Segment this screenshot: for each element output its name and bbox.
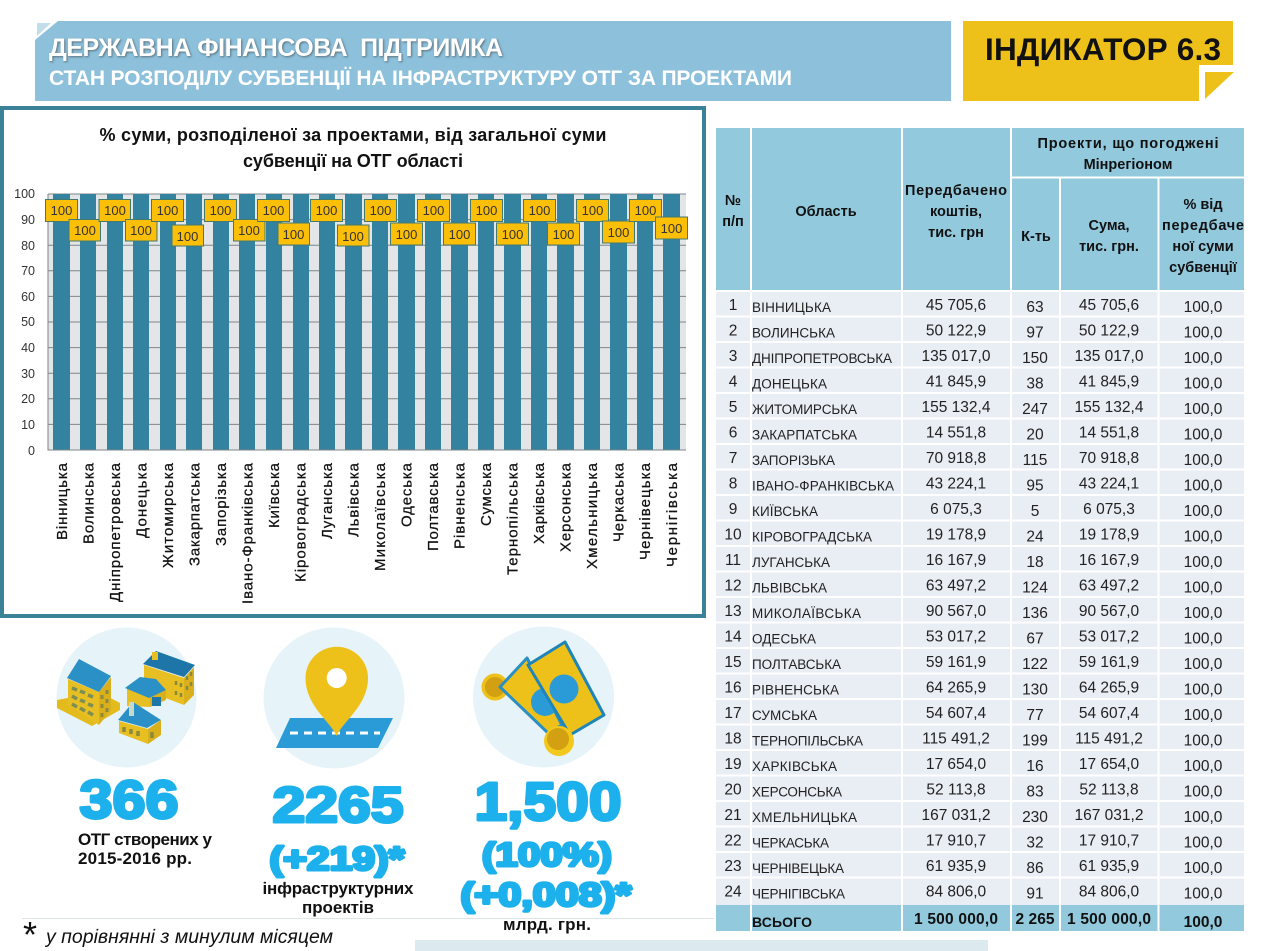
row 15: 15: [724, 654, 742, 671]
data labels: 100: [316, 203, 337, 218]
indicator badge: [963, 21, 1234, 101]
row 6: ЗАКАРПАТСЬКА: [752, 428, 857, 442]
row 11: 11: [725, 552, 741, 569]
row 20: [724, 782, 1223, 800]
row 16: 64 265,9: [1079, 680, 1139, 696]
row 8: [729, 476, 1223, 494]
y axis labels: 80: [21, 239, 35, 253]
row 4: 41 845,9: [926, 374, 986, 390]
row 22: 17 910,7: [1079, 832, 1139, 850]
row 18: 100,0: [1184, 732, 1223, 750]
total row: 1 500 000,0: [1067, 911, 1151, 928]
panel: bar chart: [2, 108, 704, 616]
row 11: 16 167,9: [926, 552, 986, 569]
row 11: [725, 552, 1223, 571]
row 22: [724, 832, 1223, 852]
table header: передбаче: [1162, 218, 1244, 234]
row 13: 90 567,0: [1079, 603, 1140, 620]
row 15: 59 161,9: [1079, 654, 1139, 671]
row 10: 19 178,9: [1079, 526, 1139, 544]
header banner: СТАН РОЗПОДІЛУ СУБВЕНЦІЇ НА ІНФРАСТРУКТУРУ ОТГ ЗА ПРОЕКТАМИ: [49, 67, 792, 90]
row 2: 100,0: [1184, 324, 1223, 342]
data labels: 100: [635, 203, 656, 218]
row 11: 18: [1026, 554, 1044, 571]
row 13: 90 567,0: [926, 603, 987, 620]
row 5: 100,0: [1184, 401, 1223, 418]
y axis labels: 40: [21, 341, 35, 355]
row 14: 53 017,2: [926, 628, 986, 646]
row 3: 135 017,0: [922, 348, 991, 365]
x axis labels: Івано-Франківська: [240, 462, 256, 604]
data labels: 100: [342, 229, 364, 244]
row 4: 4: [729, 374, 738, 390]
data labels: 100: [553, 227, 574, 242]
row 6: 14 551,8: [926, 424, 986, 442]
row 17: [724, 705, 1223, 724]
header banner: ДЕРЖАВНА ФІНАНСОВА ПІДТРИМКА: [49, 34, 503, 62]
table header: №: [725, 193, 741, 209]
x axis labels: Хмельницька: [584, 462, 601, 569]
row 17: 54 607,4: [1079, 705, 1140, 722]
data labels: 100: [449, 227, 470, 242]
table header: тис. грн: [928, 225, 984, 241]
x axis labels: Запорізька: [213, 462, 230, 546]
row 18: [724, 730, 1223, 750]
row 17: 17: [724, 705, 742, 722]
row 8: 8: [729, 476, 737, 492]
x axis labels: Херсонська: [558, 462, 574, 552]
row 3: 100,0: [1184, 350, 1223, 367]
row 24: 84 806,0: [926, 884, 987, 900]
row 16: 100,0: [1184, 682, 1223, 698]
row 10: 19 178,9: [926, 526, 986, 544]
data labels: 100: [502, 227, 523, 242]
data labels: 100: [283, 227, 304, 242]
row 19: 17 654,0: [1079, 756, 1140, 773]
row 24: 91: [1026, 886, 1044, 902]
row 14: [724, 628, 1223, 648]
row 16: 16: [724, 680, 742, 696]
x axis labels: Кіровоградська: [292, 462, 310, 582]
row 23: [724, 858, 1223, 877]
x axis labels: Дніпропетровська: [107, 462, 124, 602]
row 11: 100,0: [1184, 554, 1223, 571]
row 18: 199: [1022, 732, 1048, 750]
row 1: 1: [729, 297, 737, 314]
x axis labels: Львівська: [346, 462, 362, 537]
row 23: 23: [724, 858, 742, 875]
row 8: 100,0: [1184, 478, 1223, 494]
row 20: 83: [1026, 784, 1044, 800]
row 15: ПОЛТАВСЬКА: [752, 657, 841, 672]
row 10: КІРОВОГРАДСЬКА: [752, 530, 872, 544]
row 2: 50 122,9: [1079, 322, 1139, 340]
row 21: 230: [1022, 809, 1048, 826]
table header: ної суми: [1172, 239, 1234, 255]
row 21: [724, 807, 1223, 826]
table header: Мінрегіоном: [1084, 157, 1172, 173]
row 23: 86: [1026, 860, 1044, 877]
y axis labels: 60: [21, 290, 35, 304]
data labels: 100: [582, 203, 603, 218]
number: 100%: (100%): [482, 836, 612, 873]
row 22: 100,0: [1184, 834, 1223, 852]
table: [716, 128, 1244, 931]
row 15: [724, 654, 1223, 673]
y axis labels: 0: [28, 444, 35, 458]
data labels: 100: [423, 203, 444, 218]
row 10: 24: [1026, 528, 1044, 546]
row 7: 70 918,8: [926, 450, 986, 467]
data labels: 100: [608, 225, 629, 240]
row 12: 63 497,2: [926, 578, 986, 594]
caption: communities: [78, 830, 213, 868]
row 11: 16 167,9: [1079, 552, 1139, 569]
row 1: 45 705,6: [1079, 297, 1139, 314]
row 8: ІВАНО-ФРАНКІВСЬКА: [752, 478, 894, 494]
row 14: ОДЕСЬКА: [752, 632, 816, 646]
row 6: 20: [1026, 426, 1044, 444]
row 12: 100,0: [1184, 580, 1223, 596]
footnote: у порівнянні з минулим місяцем: [44, 926, 333, 948]
row 21: ХМЕЛЬНИЦЬКА: [752, 810, 857, 825]
stat: communities: [56, 628, 213, 868]
number: 2265: 2265: [272, 777, 404, 833]
x axis labels: Сумська: [478, 462, 495, 526]
bars: [53, 194, 680, 450]
number: +219: (+219)*: [270, 840, 405, 877]
y axis labels: [14, 187, 35, 458]
y axis labels: 20: [21, 392, 35, 406]
row 6: 14 551,8: [1079, 424, 1139, 442]
row 19: 19: [724, 756, 742, 773]
row 3: ДНІПРОПЕТРОВСЬКА: [752, 351, 892, 366]
row 14: 100,0: [1184, 630, 1223, 648]
row 10: 100,0: [1184, 528, 1223, 546]
row 13: 13: [724, 603, 742, 620]
row 21: 167 031,2: [922, 807, 990, 824]
row 21: 167 031,2: [1075, 807, 1143, 824]
x axis labels: Луганська: [319, 462, 336, 539]
row 9: КИЇВСЬКА: [752, 504, 818, 519]
row 1: 45 705,6: [926, 297, 986, 314]
x axis labels: Тернопільська: [504, 462, 522, 575]
caption: projects: [262, 879, 414, 917]
icon: banknotes and coins: [473, 626, 614, 768]
row 2: ВОЛИНСЬКА: [752, 326, 835, 340]
row 9: [729, 501, 1223, 520]
row 23: 61 935,9: [1079, 858, 1139, 875]
row 1: [729, 297, 1223, 316]
row 1: ВІННИЦЬКА: [752, 300, 831, 315]
y axis labels: 100: [14, 187, 35, 201]
row 19: [724, 756, 1223, 775]
row 6: [729, 424, 1223, 444]
row 9: 100,0: [1184, 503, 1223, 520]
row 12: [724, 578, 1223, 596]
row 16: [724, 680, 1223, 698]
row 7: [729, 450, 1223, 469]
row 4: 38: [1026, 376, 1044, 392]
data labels: 100: [104, 203, 126, 218]
row 2: 50 122,9: [926, 322, 986, 340]
x axis labels: Чернівецька: [637, 462, 654, 560]
row 3: [729, 348, 1223, 367]
row 19: 100,0: [1184, 758, 1223, 775]
row 2: 97: [1026, 324, 1044, 342]
row 24: 24: [724, 884, 742, 900]
row 5: ЖИТОМИРСЬКА: [752, 402, 857, 417]
caption: communities: ОТГ створених у: [78, 830, 213, 849]
row 23: 100,0: [1184, 860, 1223, 877]
y axis labels: 70: [21, 264, 35, 278]
row 18: 115 491,2: [922, 730, 990, 748]
header banner: [35, 21, 951, 101]
row 7: 100,0: [1184, 452, 1223, 469]
row 5: 5: [729, 399, 737, 416]
row 10: 10: [724, 526, 742, 544]
table header: % від: [1183, 197, 1223, 213]
row 7: ЗАПОРІЗЬКА: [752, 453, 835, 468]
row 17: СУМСЬКА: [752, 708, 817, 723]
caption: money: млрд. грн.: [503, 915, 591, 934]
total row: ВСЬОГО: [752, 914, 812, 930]
table header: субвенції: [1169, 260, 1238, 276]
table header: коштів,: [930, 204, 982, 220]
row 7: 70 918,8: [1079, 450, 1139, 467]
data labels: 100: [529, 203, 550, 218]
row 4: 41 845,9: [1079, 374, 1139, 390]
row 23: 61 935,9: [926, 858, 986, 875]
row 18: 18: [724, 730, 742, 748]
table header: К-ть: [1021, 229, 1051, 245]
y axis labels: 50: [21, 315, 35, 329]
data labels: 100: [370, 203, 391, 218]
row 1: 100,0: [1184, 299, 1223, 316]
indicator badge: ІНДИКАТОР 6.3: [985, 31, 1221, 67]
row 12: 124: [1022, 580, 1048, 596]
row 18: ТЕРНОПІЛЬСЬКА: [752, 734, 863, 748]
x axis labels: Волинська: [80, 462, 98, 544]
row 5: [729, 399, 1223, 418]
row 24: 84 806,0: [1079, 884, 1140, 900]
y axis labels: 10: [21, 418, 35, 432]
icon: map pin on road: [264, 628, 404, 768]
x axis labels: Одеська: [398, 462, 416, 527]
row 3: 150: [1022, 350, 1048, 367]
data labels: 100: [210, 203, 231, 218]
total row: 100,0: [1184, 914, 1222, 931]
row 5: 155 132,4: [922, 399, 991, 416]
row 13: МИКОЛАЇВСЬКА: [752, 606, 861, 621]
y axis labels: 30: [21, 367, 35, 381]
row 9: 6 075,3: [930, 501, 982, 518]
row 8: 43 224,1: [1079, 476, 1139, 492]
bottom band: [415, 940, 988, 951]
data labels: 100: [177, 229, 198, 244]
row 16: РІВНЕНСЬКА: [752, 682, 839, 698]
row 13: [724, 603, 1223, 622]
row 4: 100,0: [1184, 376, 1223, 392]
data labels: 100: [157, 203, 178, 218]
plot background: [48, 194, 686, 450]
total row: 2 265: [1016, 911, 1055, 928]
row 18: 115 491,2: [1075, 730, 1143, 748]
row 17: 100,0: [1184, 707, 1223, 724]
row 21: 21: [724, 807, 742, 824]
row 22: ЧЕРКАСЬКА: [752, 836, 829, 850]
row 20: 52 113,8: [1079, 782, 1139, 798]
x axis labels: Київська: [266, 462, 283, 528]
row 8: 95: [1026, 478, 1044, 494]
data labels: 100: [661, 221, 682, 236]
x axis labels: Житомирська: [160, 462, 177, 568]
x axis labels: Рівненська: [452, 462, 468, 549]
row 17: 77: [1026, 707, 1044, 724]
x axis labels: Черкаська: [610, 462, 628, 542]
data labels: 100: [51, 203, 72, 218]
row 15: 122: [1022, 656, 1048, 673]
row 7: 7: [729, 450, 737, 467]
number: 1,500: 1,500: [474, 772, 622, 832]
row 6: 6: [729, 424, 737, 442]
row 12: 63 497,2: [1079, 578, 1139, 594]
chart title: субвенції на ОТГ області: [243, 151, 463, 171]
stat: projects: [262, 628, 414, 917]
x axis labels: Закарпатська: [186, 462, 204, 566]
row 23: ЧЕРНІВЕЦЬКА: [752, 861, 844, 876]
row 1: 63: [1026, 299, 1044, 316]
row 16: 64 265,9: [926, 680, 986, 696]
footnote: [23, 914, 333, 951]
row 22: 32: [1026, 834, 1044, 852]
table header: Сума,: [1089, 218, 1129, 234]
data labels: 100: [476, 203, 497, 218]
x axis labels: [54, 462, 681, 604]
row 21: 100,0: [1184, 809, 1223, 826]
row 15: 100,0: [1184, 656, 1223, 673]
data labels: 100: [74, 223, 96, 238]
row 12: ЛЬВІВСЬКА: [752, 580, 827, 596]
stat: money: [460, 626, 632, 934]
row 24: ЧЕРНІГІВСЬКА: [752, 886, 845, 902]
row 16: 130: [1022, 682, 1048, 698]
row 19: 17 654,0: [926, 756, 987, 773]
x axis labels: Вінницька: [54, 462, 71, 540]
row 20: 20: [724, 782, 742, 798]
row 19: ХАРКІВСЬКА: [752, 759, 837, 774]
table header: Передбачено: [905, 183, 1007, 199]
row 20: ХЕРСОНСЬКА: [752, 784, 842, 800]
x axis labels: Донецька: [134, 462, 150, 538]
caption: projects: проектів: [302, 898, 374, 917]
chart title: % суми, розподіленої за проектами, від загальної суми: [100, 125, 606, 145]
row 4: ДОНЕЦЬКА: [752, 376, 827, 392]
row 2: [729, 322, 1223, 342]
icon: houses: [56, 628, 196, 768]
data labels: 100: [396, 227, 417, 242]
row 19: 16: [1026, 758, 1044, 775]
row 3: 3: [729, 348, 737, 365]
row 13: 100,0: [1184, 605, 1223, 622]
table header: Область: [795, 204, 857, 220]
x axis labels: Полтавська: [425, 462, 442, 551]
caption: communities: 2015-2016 рр.: [78, 849, 192, 868]
row 11: ЛУГАНСЬКА: [752, 555, 830, 570]
total row: [716, 905, 1244, 931]
y axis labels: 90: [21, 213, 35, 227]
row 22: 17 910,7: [926, 832, 986, 850]
row 14: 14: [724, 628, 742, 646]
row 10: [724, 526, 1223, 546]
x axis labels: Миколаївська: [372, 462, 389, 571]
row 24: [724, 884, 1223, 902]
row 20: 52 113,8: [926, 782, 986, 798]
row 8: 43 224,1: [926, 476, 986, 492]
table header: тис. грн.: [1079, 239, 1139, 255]
row 6: 100,0: [1184, 426, 1223, 444]
row 3: 135 017,0: [1075, 348, 1144, 365]
caption: projects: інфраструктурних: [262, 879, 414, 898]
row 22: 22: [724, 832, 742, 850]
total row: 1 500 000,0: [914, 911, 998, 928]
number: +0,008: (+0,008)*: [460, 876, 632, 913]
table body background: [716, 292, 1244, 905]
row 14: 67: [1026, 630, 1044, 648]
table header: Проекти, що погоджені: [1038, 136, 1218, 152]
table header: [716, 128, 1244, 290]
row 15: 59 161,9: [926, 654, 986, 671]
row 7: 115: [1023, 452, 1047, 469]
x axis labels: Харківська: [531, 462, 548, 544]
row 5: 247: [1022, 401, 1048, 418]
row 9: 9: [729, 501, 737, 518]
row 4: [729, 374, 1223, 392]
x axis labels: Чернігівська: [664, 462, 681, 567]
row 5: 155 132,4: [1075, 399, 1144, 416]
row 20: 100,0: [1184, 784, 1223, 800]
row 13: 136: [1022, 605, 1048, 622]
data labels: 100: [238, 223, 260, 238]
data labels: 100: [263, 203, 284, 218]
number: 366: 366: [80, 770, 178, 830]
row 9: 6 075,3: [1083, 501, 1135, 518]
data labels: [46, 200, 688, 246]
row 17: 54 607,4: [926, 705, 987, 722]
data labels: 100: [130, 223, 152, 238]
row 9: 5: [1031, 503, 1039, 520]
row 12: 12: [724, 578, 742, 594]
chart title: [100, 125, 606, 171]
table header: п/п: [722, 214, 744, 230]
row 2: 2: [729, 322, 737, 340]
row 24: 100,0: [1184, 886, 1223, 902]
row 14: 53 017,2: [1079, 628, 1139, 646]
